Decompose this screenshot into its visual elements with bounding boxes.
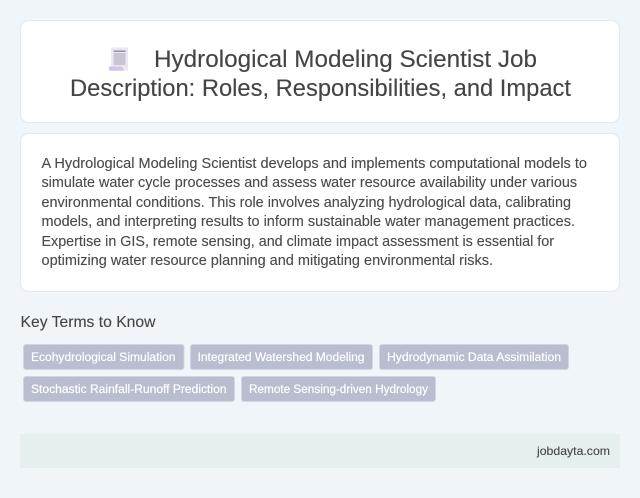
heading: key terms: Key Terms to Know: [20, 314, 156, 331]
chip: integrated watershed modeling: [190, 344, 372, 370]
icon: receipt document: [109, 48, 128, 71]
description text block: A Hydrological Modeling Scientist develops and implements computational models to: [42, 156, 587, 172]
chip: ecohydrological simulation: [24, 344, 184, 370]
footer site name: jobdayta.com: [536, 444, 610, 458]
chip: stochastic rainfall-runoff prediction: Stochastic Rainfall-Runoff Prediction: [31, 382, 227, 396]
description text block: environmental conditions. This role involves analyzing hydrological data, calibrating: [42, 195, 571, 211]
description text block: Expertise in GIS, remote sensing, and climate impact assessment is essential for: [42, 234, 554, 250]
footer bar: [20, 434, 620, 468]
chip: hydrodynamic data assimilation: Hydrodynamic Data Assimilation: [387, 350, 561, 364]
title: Description: Roles, Responsibilities, and Impact: [70, 75, 571, 102]
chip: ecohydrological simulation: Ecohydrological Simulation: [31, 350, 176, 364]
chip: remote sensing-driven hydrology: [242, 376, 436, 402]
key term chips: [24, 344, 568, 402]
title: Hydrological Modeling Scientist Job: [154, 46, 537, 73]
description text block: [42, 156, 587, 269]
description text block: models, and interpreting results to inform sustainable water management practices.: [42, 214, 575, 230]
panel: title card: [20, 20, 620, 122]
description text block: simulate water cycle processes and assess water resource availability under various: [42, 175, 577, 191]
chip: stochastic rainfall-runoff prediction: [24, 376, 234, 402]
chip: remote sensing-driven hydrology: Remote Sensing-driven Hydrology: [249, 382, 429, 396]
panel: description card: [20, 134, 620, 292]
title: [70, 46, 571, 102]
description text block: optimizing water resource planning and mitigating environmental risks.: [42, 253, 493, 269]
chip: integrated watershed modeling: Integrated Watershed Modeling: [198, 350, 365, 364]
chip: hydrodynamic data assimilation: [380, 344, 568, 370]
